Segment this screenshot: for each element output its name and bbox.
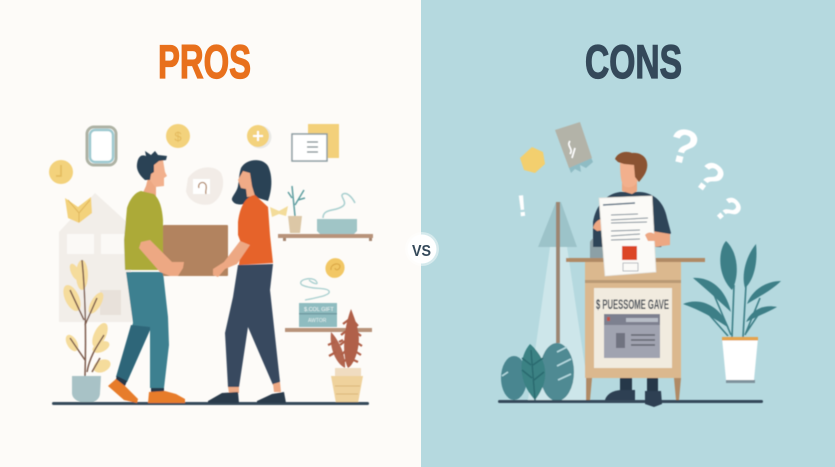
document held up [599, 196, 656, 276]
icon: hanging tag [555, 122, 593, 173]
floor lamp [528, 202, 590, 400]
figure: presenter [590, 152, 671, 407]
icon: documents [292, 124, 339, 161]
icon: note blob [186, 167, 223, 205]
browser window graphic [604, 314, 660, 358]
ground line [52, 402, 369, 405]
panel: cons scene [498, 118, 781, 407]
plant: potted leaves [683, 241, 781, 383]
title: PROS: PROS [158, 35, 251, 88]
panel: pros scene [49, 124, 373, 405]
icon: question mark large: ? [663, 118, 704, 177]
icon: hexagon coin [520, 147, 545, 173]
upper shelf with plant and teal box [270, 186, 373, 241]
lectern [566, 258, 705, 400]
icon: house backdrop [59, 193, 132, 322]
icon: question mark medium: ? [686, 151, 734, 204]
lower shelf with teal device [285, 279, 372, 332]
lectern sign text: $ PUESSOME GAVE [596, 297, 669, 312]
icon: coin top [166, 124, 190, 148]
plant: monstera [501, 343, 574, 401]
plant: red fern in pot [328, 309, 363, 403]
lower shelf with teal device: AWTOR [308, 318, 327, 324]
figure: man carrying box [108, 151, 228, 403]
plant: yellow branches in pot [60, 260, 113, 403]
icon: gold envelope [65, 197, 92, 223]
icon: oval coin [322, 255, 348, 281]
badge: VS: VS [412, 243, 431, 260]
ground line [498, 400, 763, 403]
icon: coin top: $ [174, 129, 182, 144]
icon: coin left [49, 160, 73, 184]
badge: VS [405, 232, 439, 266]
icon: exclamation mark: ! [515, 190, 529, 223]
icon: question mark small: ? [706, 188, 751, 232]
icon: mirror [87, 127, 116, 165]
title: CONS: CONS [585, 35, 682, 88]
icon: plus coin [247, 125, 272, 148]
lower shelf with teal device: $.COL GIFT [304, 307, 334, 313]
box [163, 225, 228, 276]
figure: woman carrying box [208, 160, 286, 403]
